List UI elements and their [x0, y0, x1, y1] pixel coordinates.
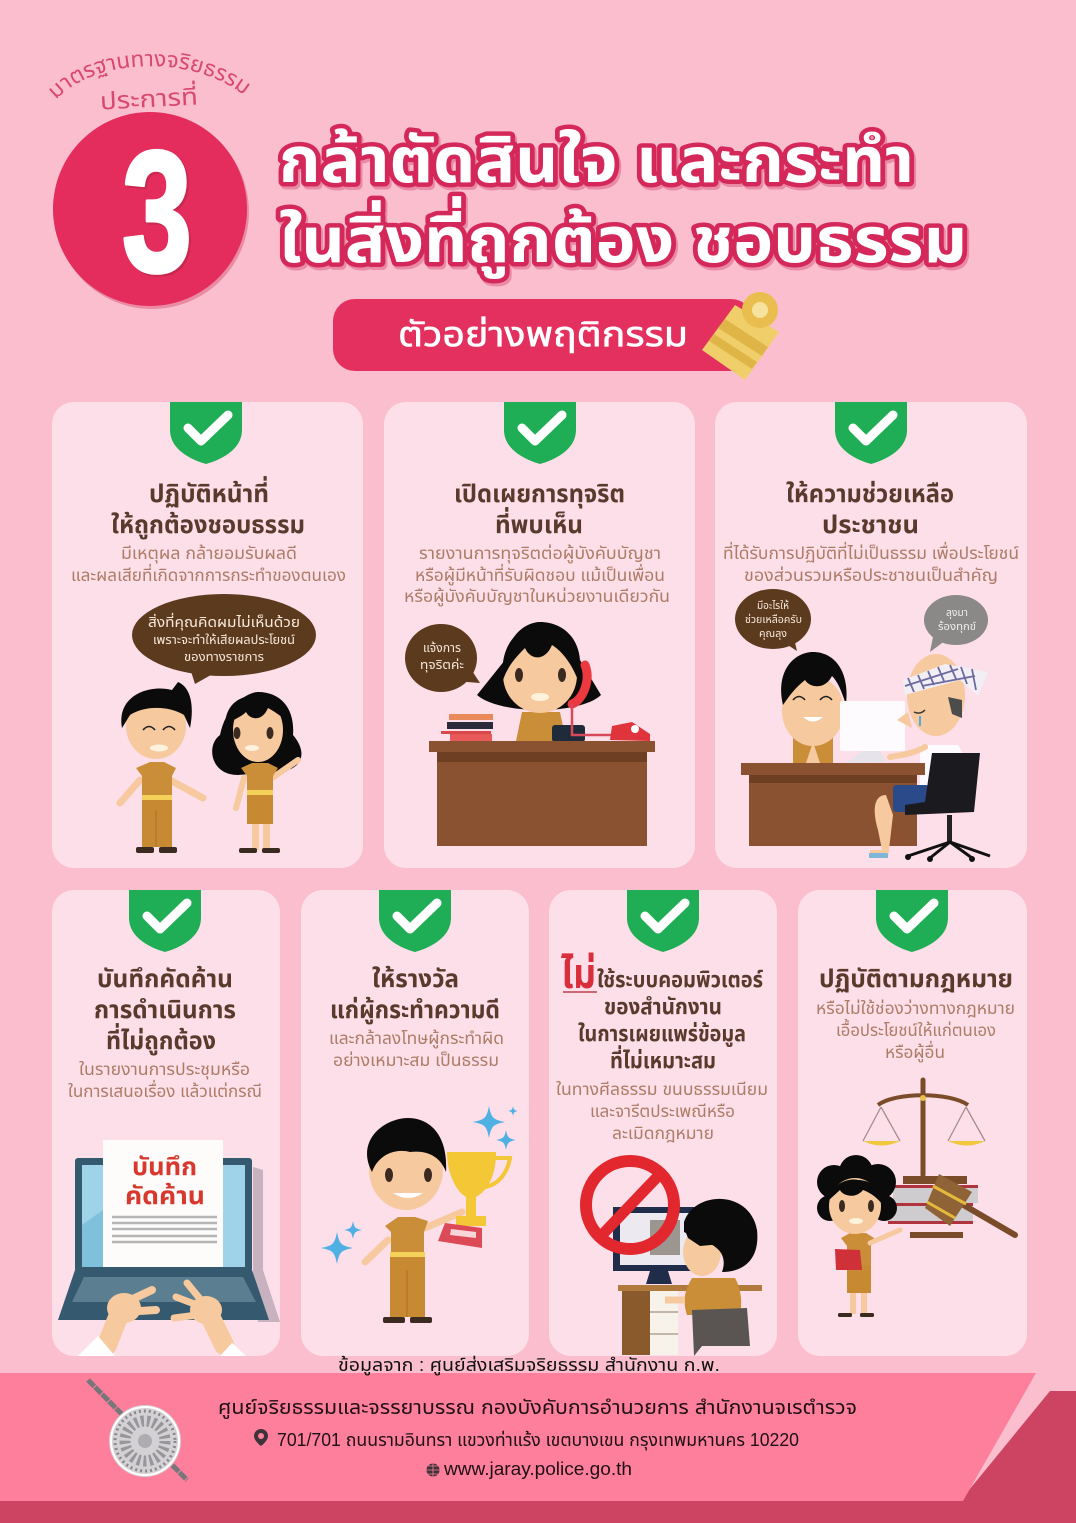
speech bubble: [405, 624, 480, 692]
banner: behaviour examples: ตัวอย่างพฤติกรรม: [398, 315, 688, 354]
icon: green check shield: [379, 890, 451, 952]
document: objection memo: บันทึก: [132, 1153, 197, 1181]
banner: behaviour examples: [333, 292, 779, 380]
heading: ให้ความช่วยเหลือ: [786, 480, 954, 508]
body text: ในทางศีลธรรม ขนบธรรมเนียม: [556, 1080, 768, 1099]
speech bubble: officer: มีอะไรให้: [757, 600, 789, 612]
illustration: officer holding trophy: [365, 1118, 510, 1323]
panel: disclose corruption: [384, 402, 695, 868]
curved caption: [49, 53, 250, 116]
heading: ไม่: [561, 950, 596, 997]
source credit: ข้อมูลจาก : ศูนย์ส่งเสริมจริยธรรม สำนักงาน ก.พ.: [338, 1355, 720, 1377]
icon: green check shield: [504, 402, 576, 464]
icon: green check shield: [835, 402, 907, 464]
speech bubble: แจ้งการ: [423, 641, 461, 655]
illustration: officer behind desk: [781, 652, 847, 763]
icon: gold rank tag: [702, 292, 779, 380]
illustration: woman with book: [817, 1155, 900, 1317]
panel: perform duties rightly: [52, 402, 363, 868]
heading: การดำเนินการ: [94, 996, 236, 1024]
body text: [329, 1028, 504, 1070]
speech bubble: officer: [735, 589, 811, 651]
body text: และผลเสียที่เกิดจากการกระทำของตนเอง: [71, 563, 346, 585]
curved caption: ประการที่: [99, 80, 199, 116]
heading: ประชาชน: [822, 511, 919, 539]
icon: prohibition sign: [586, 1161, 674, 1249]
heading: ปฏิบัติหน้าที่: [149, 476, 269, 508]
body text: เอื้อประโยชน์ให้แก่ตนเอง: [836, 1018, 996, 1040]
body text: [556, 1080, 768, 1143]
body text: ของส่วนรวมหรือประชาชนเป็นสำคัญ: [744, 566, 998, 585]
illustration: old man with loincloth headband: [890, 654, 988, 790]
illustration: scales of justice: [863, 1080, 985, 1175]
heading: แก่ผู้กระทำความดี: [330, 996, 500, 1025]
body text: ในรายงานการประชุมหรือ: [79, 1060, 250, 1080]
illustration: laptop with hands: [58, 1140, 280, 1356]
body text: [71, 543, 346, 585]
body text: หรือผู้อื่น: [885, 1040, 945, 1064]
body text: [68, 1060, 262, 1101]
heading: ที่ไม่เหมาะสม: [610, 1045, 716, 1073]
icon: police seal with sword: [88, 1380, 187, 1480]
illustration: male officer: [120, 682, 203, 853]
illustration: female officer: [212, 692, 301, 853]
body text: [404, 543, 670, 608]
body text: [816, 998, 1015, 1064]
speech bubble: officer: คุณลุง: [759, 628, 787, 640]
heading: [561, 950, 763, 1073]
illustration: desk: [429, 741, 655, 846]
number circle: 3: [124, 118, 194, 310]
heading: [330, 965, 500, 1025]
body text: หรือผู้มีหน้าที่รับผิดชอบ แม้เป็นเพื่อน: [415, 563, 665, 587]
heading: ให้รางวัล: [372, 965, 459, 993]
curved caption: มาตรฐานทางจริยธรรม: [49, 53, 250, 98]
number circle: 3: [122, 116, 192, 308]
footer address with pin icon: 701/701 ถนนรามอินทรา แขวงท่าแร้ง เขตบางเขน กรุงเทพมหานคร 10220: [277, 1430, 799, 1451]
heading: ในการเผยแพร่ข้อมูล: [578, 1021, 746, 1047]
header: ethics standard number badge: [49, 53, 250, 310]
illustration: office chair and legs: [869, 753, 990, 862]
illustration: man at computer: [613, 1199, 762, 1356]
speech bubble: ทุจริตค่ะ: [420, 658, 464, 672]
number circle: [53, 112, 249, 310]
panel: do not misuse computers: [549, 890, 777, 1356]
icon: trophy: [438, 1152, 510, 1248]
illustration: law books and gavel: [888, 1174, 1015, 1238]
icon: green check shield: [170, 402, 242, 464]
body text: หรือไม่ใช้ช่องว่างทางกฎหมาย: [816, 998, 1015, 1018]
title: กล้าตัดสินใจ และกระทำ: [279, 126, 914, 196]
heading: ที่พบเห็น: [495, 507, 583, 539]
document: objection memo: [103, 1140, 223, 1267]
icon: green check shield: [627, 890, 699, 952]
heading: [111, 476, 305, 540]
icon: globe: [426, 1464, 440, 1476]
body text: รายงานการทุจริตต่อผู้บังคับบัญชา: [419, 543, 661, 565]
body text: ที่ได้รับการปฏิบัติที่ไม่เป็นธรรม เพื่อประโยชน์: [723, 541, 1019, 563]
heading: ของสำนักงาน: [604, 994, 722, 1019]
illustration: stacked books: [441, 714, 493, 741]
footer organisation name: ศูนย์จริยธรรมและจรรยาบรรณ กองบังคับการอำนวยการ สำนักงานจเรตำรวจ: [218, 1397, 857, 1420]
panel: follow the law: [798, 890, 1027, 1356]
heading: [94, 965, 236, 1056]
illustration: computer monitor: [840, 701, 905, 763]
footer background bands: [0, 1373, 1076, 1523]
heading: [454, 480, 625, 539]
body text: ละเมิดกฎหมาย: [612, 1124, 714, 1143]
speech bubble: citizen: ลุงมา: [946, 607, 968, 619]
body text: และจารีตประเพณีหรือ: [590, 1102, 735, 1121]
heading: ให้ถูกต้องชอบธรรม: [111, 511, 305, 540]
document: objection memo: คัดค้าน: [125, 1182, 205, 1210]
footer website with globe icon: www.jaray.police.go.th: [443, 1459, 632, 1479]
panel: reward good deeds: [301, 890, 529, 1356]
speech bubble: ของทางราชการ: [184, 650, 264, 664]
panel: record objection: [52, 890, 280, 1356]
body text: หรือผู้บังคับบัญชาในหน่วยงานเดียวกัน: [404, 586, 670, 608]
body text: และกล้าลงโทษผู้กระทำผิด: [329, 1028, 504, 1050]
speech bubble: [132, 594, 316, 684]
speech bubble: citizen: ร้องทุกข์: [938, 621, 976, 633]
speech bubble: เพราะจะทำให้เสียผลประโยชน์: [153, 633, 295, 647]
illustration: woman at desk on phone: [477, 622, 650, 742]
speech bubble: สิ่งที่คุณคิดผมไม่เห็นด้วย: [148, 612, 300, 631]
icon: green check shield: [129, 890, 201, 952]
body text: อย่างเหมาะสม เป็นธรรม: [333, 1051, 499, 1070]
heading: ใช้ระบบคอมพิวเตอร์: [597, 967, 763, 992]
icon: green check shield: [876, 890, 948, 952]
title: ในสิ่งที่ถูกต้อง ชอบธรรม: [279, 196, 967, 279]
title: [279, 126, 967, 279]
body text: มีเหตุผล กล้ายอมรับผลดี: [121, 543, 297, 564]
illustration: desk: [741, 763, 925, 846]
heading: เปิดเผยการทุจริต: [454, 480, 625, 509]
speech bubble: officer: ช่วยเหลือครับ: [745, 613, 802, 626]
heading: ปฏิบัติตามกฎหมาย: [819, 965, 1013, 993]
panel: help citizens: [715, 402, 1027, 868]
heading: ที่ไม่ถูกต้อง: [106, 1023, 216, 1056]
body text: [723, 541, 1019, 585]
speech bubble: citizen: [924, 595, 988, 652]
illustration: sparkles: [321, 1106, 518, 1264]
heading: บันทึกคัดค้าน: [97, 965, 233, 993]
icon: map pin: [254, 1429, 268, 1446]
heading: [786, 480, 954, 539]
body text: ในการเสนอเรื่อง แล้วแต่กรณี: [68, 1079, 262, 1101]
